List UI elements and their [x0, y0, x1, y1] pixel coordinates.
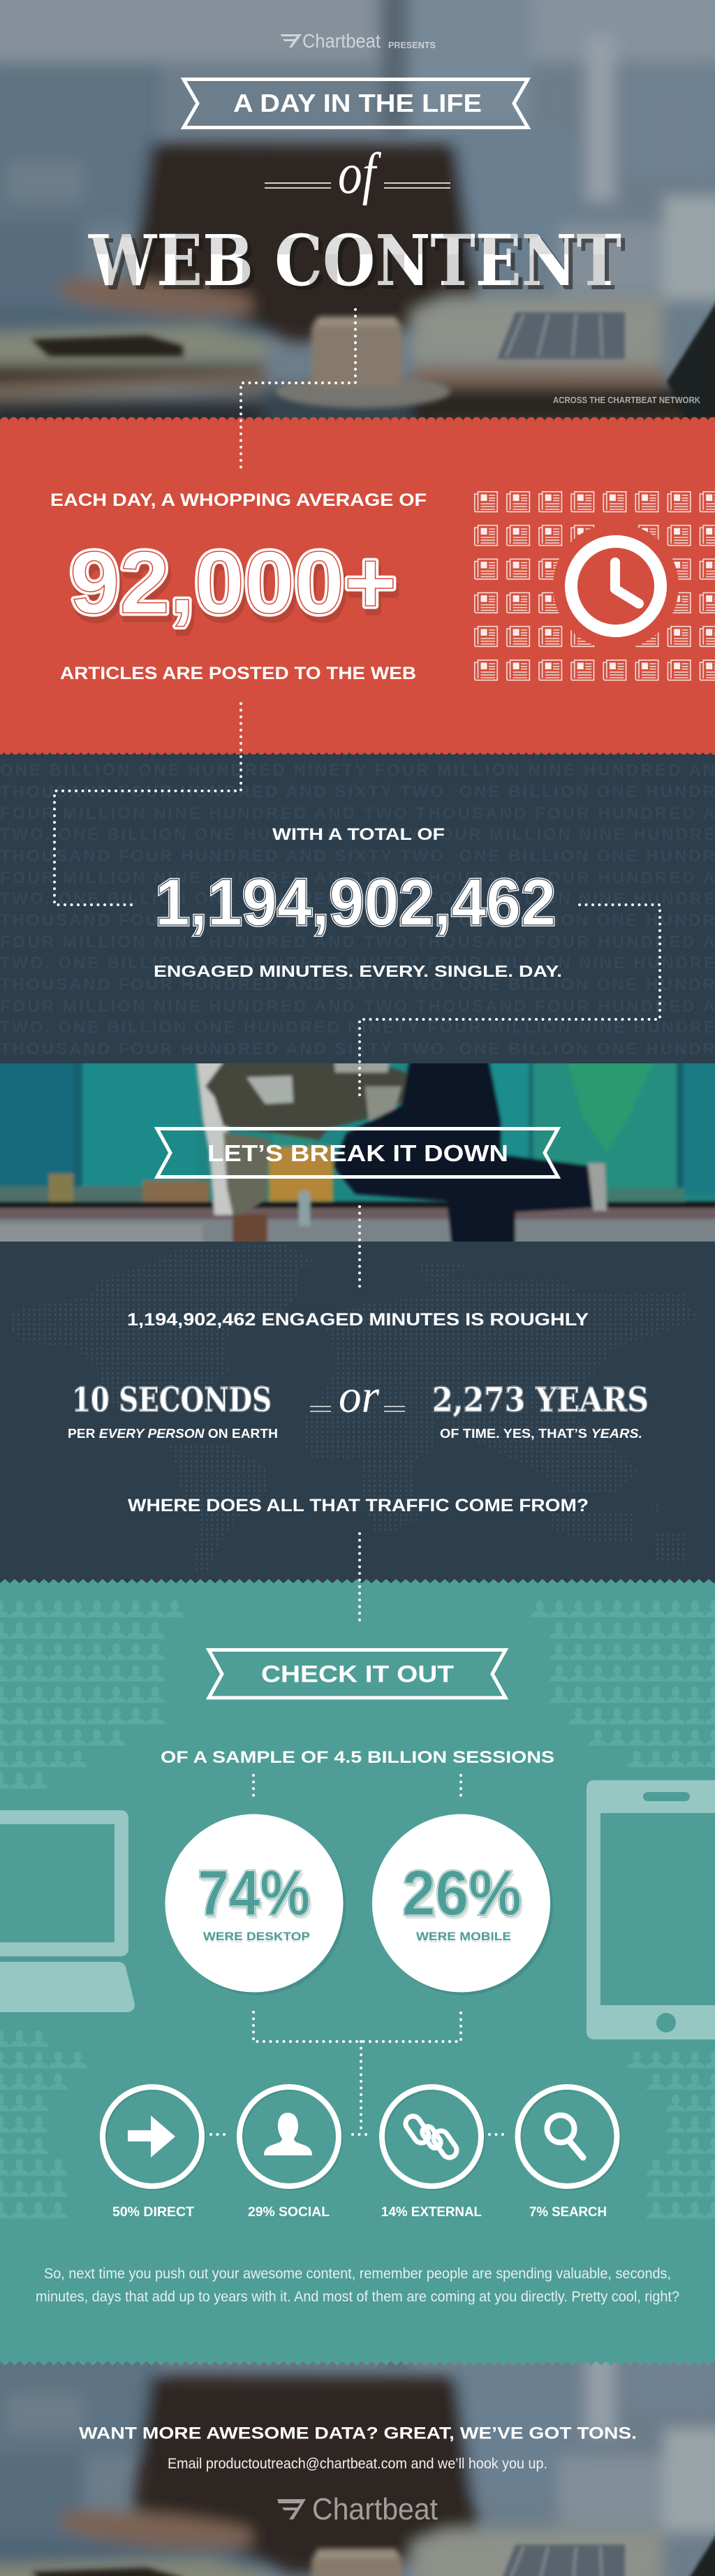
- background number words: THOUSAND FOUR HUNDRED AND SIXTY TWO. ONE BILLION ONE HUNDR: [0, 1040, 715, 1058]
- text: email line: Email productoutreach@chartbeat.com and we’ll hook you up.: [168, 2456, 547, 2472]
- text: engaged minutes: ENGAGED MINUTES. EVERY. SINGLE. DAY.: [154, 962, 562, 980]
- stat circle: 26% mobile: 26%: [402, 1858, 522, 1929]
- footer: call to action: WANT MORE AWESOME DATA? GREAT, WE’VE GOT TONS.: [79, 2424, 637, 2443]
- ribbon: check it out: [209, 1650, 506, 1698]
- connector: dotted line to 26%: [459, 1775, 462, 1800]
- paragraph: closing remark: So, next time you push out your awesome content, remember people are spending valuable, seconds,: [44, 2266, 671, 2282]
- text: roughly: 1,194,902,462 ENGAGED MINUTES IS ROUGHLY: [127, 1310, 589, 1330]
- source circle: social: 29% SOCIAL: [248, 2204, 330, 2220]
- title: web content: WEB CONTENT: [88, 219, 621, 302]
- background number words: TWO. ONE BILLION ONE HUNDRED NINETY FOUR MILLION NINE HUNDRE: [0, 954, 715, 973]
- script word: or: [310, 1369, 405, 1422]
- stat circle: 26% mobile: WERE MOBILE: [416, 1933, 511, 1945]
- ribbon: a day in the life: [184, 80, 528, 127]
- source circle: external: 14% EXTERNAL: [381, 2204, 482, 2220]
- stat circle: 26% mobile: 26%: [402, 1858, 522, 1929]
- connector: dotted path navy to teal: [358, 1534, 361, 1623]
- world map dots: [10, 1245, 702, 1573]
- footer photo background: [0, 2362, 715, 2576]
- stat circle: 74% desktop: 74%: [198, 1858, 310, 1929]
- logo: Chartbeat presents: [281, 30, 436, 52]
- source circle: search: 7% SEARCH: [529, 2204, 607, 2220]
- icon: chain link: [403, 2113, 459, 2160]
- text: with a total of: WITH A TOTAL OF: [272, 825, 445, 844]
- ribbon: a day in the life: A DAY IN THE LIFE: [233, 89, 482, 117]
- background number words: FOUR MILLION NINE HUNDRED AND TWO THOUSAND FOUR HUNDRED A: [0, 804, 715, 823]
- ribbon: let's break it down: [157, 1129, 558, 1177]
- paragraph: closing remark: minutes, days that add up to years with it. And most of them are coming at you directly. Pretty cool, right?: [36, 2289, 679, 2305]
- connector: dotted path navy to dancer: [360, 905, 660, 1098]
- source circle: direct: [103, 2087, 203, 2220]
- icon: arrow: [128, 2116, 175, 2157]
- stat circle: 74% desktop: [165, 1814, 346, 1995]
- paragraph: closing remark: [36, 2266, 679, 2305]
- icon: clock: [553, 523, 679, 649]
- people pattern right: [530, 1601, 715, 2219]
- stat circle: 26% mobile: [372, 1814, 553, 1995]
- stat circle: 74% desktop: 74%: [198, 1858, 310, 1929]
- stat circle: 74% desktop: 74%: [200, 1861, 312, 1932]
- big number: 92,000+: 92,000+: [73, 539, 399, 638]
- text: articles are posted: ARTICLES ARE POSTED TO THE WEB: [60, 664, 416, 683]
- script word: of: of: [338, 141, 382, 206]
- background number words: FOUR MILLION NINE HUNDRED AND TWO THOUSAND FOUR HUNDRED A: [0, 997, 715, 1016]
- heading: each day: EACH DAY, A WHOPPING AVERAGE OF: [50, 490, 427, 510]
- script word: of: [265, 141, 450, 206]
- big number: total minutes: 1,194,902,462: [155, 866, 556, 940]
- background number words: TWO. ONE BILLION ONE HUNDRED NINETY FOUR MILLION NINE HUNDRE: [0, 825, 715, 844]
- panel: navy roughly with world map: [0, 1242, 715, 1584]
- big number: 92,000+: 92,000+: [70, 533, 397, 632]
- background number words: THOUSAND FOUR HUNDRED AND SIXTY TWO. ONE BILLION ONE HUNDR: [0, 975, 715, 994]
- connector: dotted path red to navy: [54, 704, 241, 905]
- icon: laptop: [0, 1810, 135, 2012]
- ribbon: let's break it down: LET’S BREAK IT DOWN: [207, 1140, 508, 1166]
- logo: Chartbeat presents: PRESENTS: [388, 40, 436, 50]
- people pattern left: [0, 1601, 184, 2219]
- hero photo background: [0, 0, 715, 437]
- stat circle: 26% mobile: 26%: [404, 1861, 524, 1932]
- connector: dotted path dancer to map: [358, 1207, 361, 1287]
- background number words: FOUR MILLION NINE HUNDRED AND TWO THOUSAND FOUR HUNDRED A: [0, 868, 715, 887]
- panel: red articles: [0, 417, 715, 755]
- icon: person: [264, 2113, 312, 2155]
- stat: 2,273 years: [432, 1381, 649, 1441]
- stat: 2,273 years: 2,273 YEARS: [432, 1381, 649, 1420]
- connector: dots between source circles: [211, 2133, 507, 2136]
- big number: total minutes: 1,194,902,462: [155, 866, 556, 940]
- logo: Chartbeat: Chartbeat: [312, 2492, 438, 2526]
- background number words: [0, 761, 715, 1058]
- question: where does traffic come from: WHERE DOES ALL THAT TRAFFIC COME FROM?: [128, 1496, 589, 1515]
- background number words: THOUSAND FOUR HUNDRED AND SIXTY TWO. ONE BILLION ONE HUNDR: [0, 847, 715, 866]
- script word: or: or: [339, 1369, 380, 1422]
- connector: dotted bracket to sources: [253, 2012, 461, 2134]
- stat: 10 seconds: [68, 1381, 278, 1441]
- background number words: FOUR MILLION NINE HUNDRED AND TWO THOUSAND FOUR HUNDRED A: [0, 933, 715, 952]
- logo: Chartbeat presents: Chartbeat: [302, 30, 381, 52]
- panel: teal traffic sources: [0, 1579, 715, 2362]
- source circle: social: [239, 2087, 340, 2220]
- caption: across the chartbeat network: ACROSS THE CHARTBEAT NETWORK: [553, 395, 700, 405]
- footer: call to action: [79, 2424, 637, 2526]
- big number: 92,000+: 92,000+: [70, 533, 397, 632]
- connector: dotted path hero to red: [241, 310, 355, 470]
- background number words: ONE BILLION ONE HUNDRED NINETY FOUR MILLION NINE HUNDRED AN: [0, 761, 715, 780]
- background number words: TWO. ONE BILLION ONE HUNDRED NINETY FOUR MILLION NINE HUNDRE: [0, 889, 715, 908]
- text: sample of sessions: OF A SAMPLE OF 4.5 BILLION SESSIONS: [161, 1748, 554, 1767]
- connector: dotted line to 74%: [252, 1775, 255, 1800]
- title: web content: WEB CONTENT: [92, 224, 626, 306]
- stat: 10 seconds: 10 SECONDS: [72, 1381, 272, 1420]
- stat circle: 74% desktop: WERE DESKTOP: [203, 1930, 310, 1943]
- photo: dancer banner: [0, 1055, 715, 1251]
- source circle: direct: 50% DIRECT: [112, 2204, 194, 2220]
- stat: 10 seconds: PER EVERY PERSON ON EARTH: [68, 1427, 278, 1441]
- icon: phone: [587, 1780, 715, 2039]
- background number words: THOUSAND FOUR HUNDRED AND SIXTY TWO. ONE BILLION ONE HUNDR: [0, 911, 715, 930]
- icon: magnifier: [547, 2116, 583, 2157]
- background number words: TWO. ONE BILLION ONE HUNDRED NINETY FOUR MILLION NINE HUNDRE: [0, 1018, 715, 1037]
- stat circle: 74% desktop: WERE DESKTOP: [203, 1933, 310, 1945]
- stat: 10 seconds: 10 SECONDS: [72, 1381, 272, 1420]
- ribbon: check it out: CHECK IT OUT: [261, 1661, 454, 1688]
- stat: 2,273 years: 2,273 YEARS: [432, 1381, 649, 1420]
- stat: 2,273 years: OF TIME. YES, THAT’S YEARS.: [440, 1427, 642, 1441]
- source circle: search: [518, 2087, 619, 2220]
- panel: navy total minutes: [0, 752, 715, 1063]
- source circle: external: [381, 2087, 482, 2220]
- stat circle: 26% mobile: WERE MOBILE: [416, 1930, 511, 1943]
- icon grid: newspapers: [474, 491, 715, 692]
- background number words: THOUSAND FOUR HUNDRED AND SIXTY TWO. ONE BILLION ONE HUNDR: [0, 783, 715, 801]
